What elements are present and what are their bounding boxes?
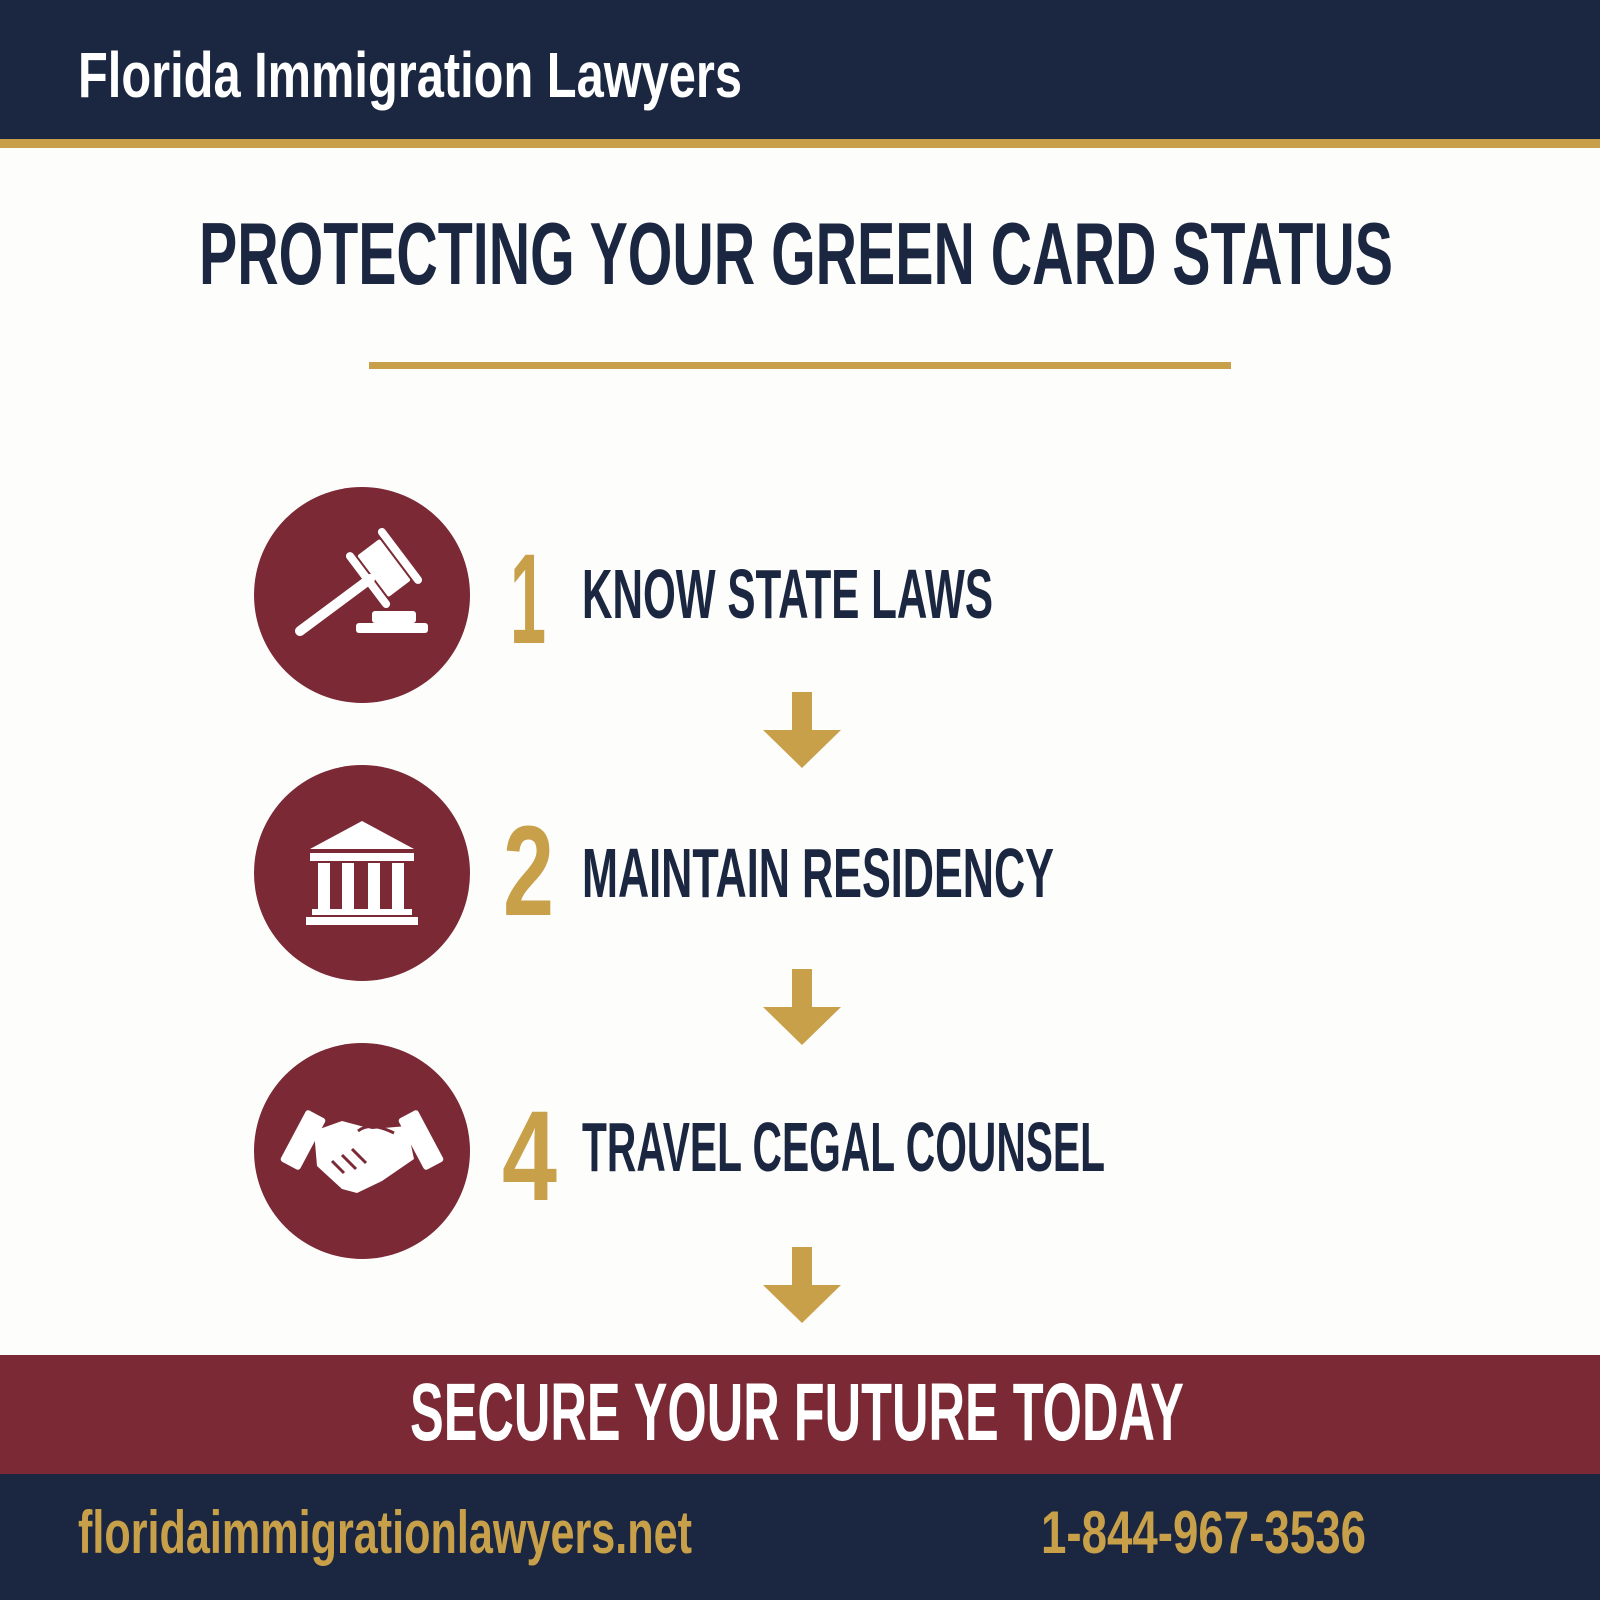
step 4 (254, 1043, 1105, 1259)
number 1: 1 (510, 528, 546, 671)
step 4 label: TRAVEL CEGAL COUNSEL (582, 1108, 1105, 1186)
arrow 3 (763, 1247, 841, 1323)
title underline (369, 362, 1231, 369)
step 2 label: MAINTAIN RESIDENCY (582, 834, 1054, 912)
arrow 2 (763, 969, 841, 1045)
header text: Florida Immigration Lawyers (78, 39, 742, 111)
step 1 (254, 487, 993, 703)
phone: 1-844-967-3536 (1041, 1499, 1366, 1566)
icon: handshake (254, 1043, 470, 1259)
number 2: 2 (503, 800, 554, 943)
icon: courthouse (254, 765, 470, 981)
step 2 (254, 765, 1054, 981)
footer (0, 1474, 1600, 1600)
step 1 label: KNOW STATE LAWS (582, 555, 993, 633)
banner: call to action (0, 1355, 1600, 1474)
header bar (0, 0, 1600, 148)
arrow 1 (763, 692, 841, 768)
number 4: 4 (502, 1085, 557, 1228)
website: floridaimmigrationlawyers.net (78, 1499, 692, 1566)
icon: gavel (254, 487, 470, 703)
